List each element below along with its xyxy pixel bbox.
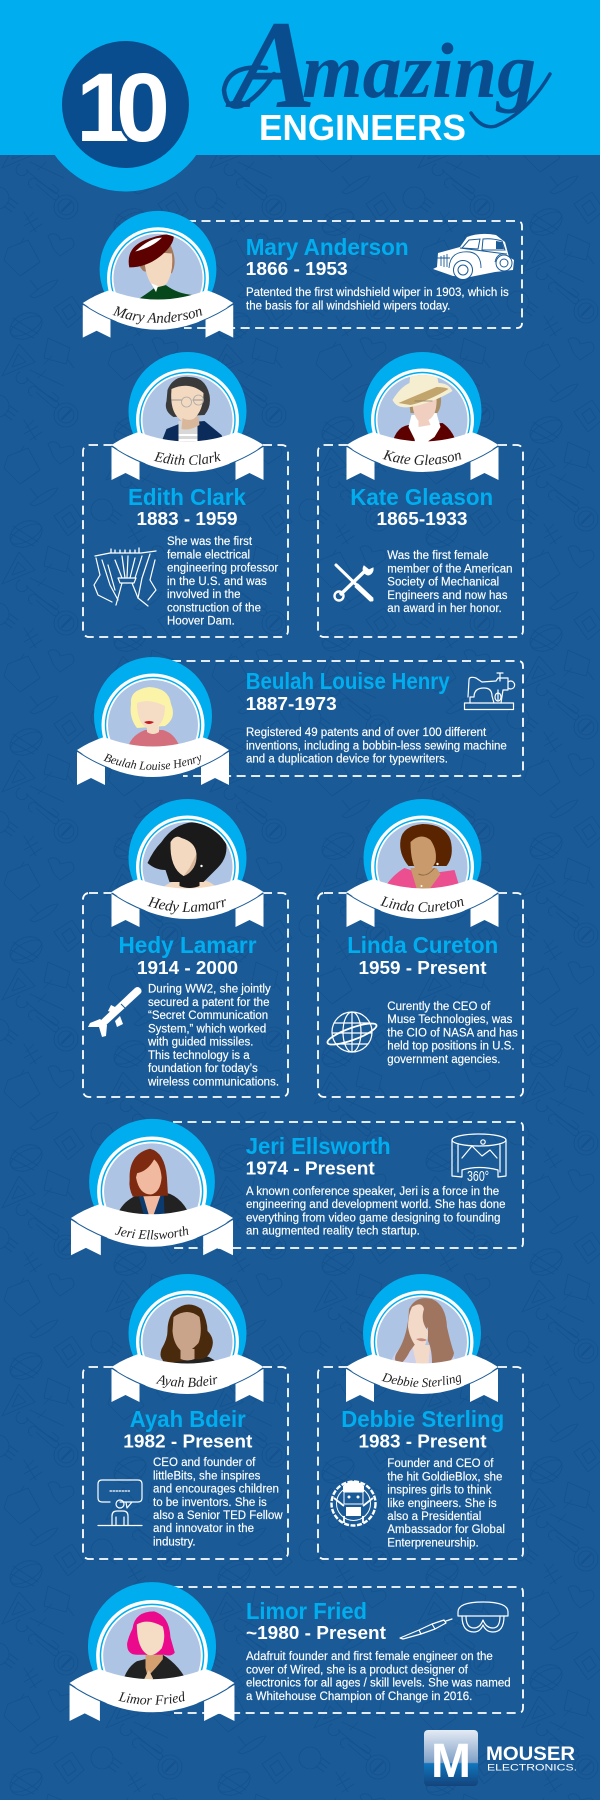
- description: to be inventors. She is: [153, 1497, 267, 1509]
- portrait badge: Kate Gleason: [346, 352, 498, 480]
- description: the CIO of NASA and has: [387, 1027, 518, 1039]
- description: inspires girls to think: [387, 1484, 492, 1496]
- header band: [0, 0, 600, 192]
- name: Hedy Lamarr: [118, 932, 257, 958]
- portrait badge: Linda Cureton: [346, 799, 499, 927]
- portrait badge: Mary Anderson: [82, 210, 234, 338]
- portrait badge: Ayah Bdeir: Ayah Bdeir: [156, 1375, 218, 1388]
- description: Ambassador for Global: [387, 1524, 505, 1536]
- description: Hoover Dam.: [167, 616, 235, 628]
- portrait badge: Edith Clark: [112, 352, 264, 480]
- icon: car: [433, 234, 514, 280]
- description: littleBits, she inspires: [153, 1470, 261, 1482]
- description: Muse Technologies, was: [387, 1014, 513, 1026]
- description: engineering professor: [167, 563, 278, 575]
- icon: safety goggles: [458, 1602, 508, 1632]
- panel: Beulah Louise Henry: [77, 657, 524, 785]
- description: a Whitehouse Champion of Change in 2016.: [246, 1691, 472, 1703]
- portrait badge: Linda Cureton: Linda Cureton: [380, 896, 464, 912]
- title: Amazing: A: [225, 0, 316, 135]
- description: Society of Mechanical: [387, 576, 499, 588]
- description: in the U.S. and was: [167, 576, 267, 588]
- title: Amazing: [224, 0, 550, 135]
- portrait badge: Beulah Louise Henry: Beulah Louise Henry: [103, 754, 202, 770]
- description: During WW2, she jointly: [148, 984, 271, 996]
- name: Debbie Sterling: [341, 1406, 504, 1432]
- portrait badge: Debbie Sterling: Debbie Sterling: [382, 1372, 462, 1388]
- description: inventions, including a bobbin-less sewing machine: [246, 740, 507, 752]
- description: everything from video game designing to founding: [246, 1212, 500, 1224]
- description: System,” which worked: [148, 1023, 266, 1035]
- description: and encourages children: [153, 1484, 279, 1496]
- name: Jeri Ellsworth: [246, 1133, 391, 1159]
- panel: Linda Cureton: [317, 799, 524, 1098]
- portrait badge: Edith Clark: Edith Clark: [154, 452, 221, 465]
- description: also a Presidential: [387, 1511, 481, 1523]
- logo: Mouser Electronics: [424, 1730, 577, 1788]
- panel: Ayah Bdeir: [82, 1274, 289, 1560]
- portrait badge: Jeri Ellsworth: [71, 1118, 233, 1256]
- description: and innovator in the: [153, 1523, 254, 1535]
- description: the basis for all windshield wipers today.: [246, 300, 450, 312]
- dates: 1983 - Present: [358, 1431, 486, 1452]
- dates: 1883 - 1959: [136, 508, 238, 529]
- dates: 1866 - 1953: [246, 258, 348, 279]
- icon: dam: [94, 548, 156, 606]
- description: foundation for today’s: [148, 1063, 258, 1075]
- icon: speaker with speech bubble: [98, 1480, 142, 1526]
- dates: ~1980 - Present: [246, 1622, 386, 1643]
- description: secured a patent for the: [148, 997, 269, 1009]
- panel: Kate Gleason: [317, 352, 524, 638]
- name: Mary Anderson: [246, 234, 409, 260]
- dates: 1959 - Present: [358, 957, 486, 978]
- description: wireless communications.: [147, 1076, 279, 1088]
- portrait badge: Hedy Lamarr: [111, 799, 264, 927]
- icon: globe: [326, 1012, 378, 1052]
- description: like engineers. She is: [387, 1498, 497, 1510]
- number badge: 10: [62, 41, 189, 168]
- description: female electrical: [167, 549, 250, 561]
- description: cover of Wired, she is a product designer of: [246, 1664, 469, 1676]
- portrait badge: Jeri Ellsworth: Jeri Ellsworth: [114, 1226, 189, 1240]
- description: Curently the CEO of: [387, 1001, 491, 1013]
- description: held top positions in U.S.: [387, 1041, 515, 1053]
- name: Beulah Louise Henry: [246, 668, 450, 694]
- dates: 1974 - Present: [246, 1158, 375, 1179]
- logo wordmark: MOUSER: [486, 1743, 575, 1765]
- description: an award in her honor.: [387, 603, 502, 615]
- description: electronics for all ages / skill levels. She was named: [246, 1678, 511, 1690]
- icon: soldering iron: [400, 1619, 452, 1639]
- icon: 360 view: [452, 1134, 506, 1185]
- panel: Jeri Ellsworth: [71, 1118, 524, 1256]
- name: Ayah Bdeir: [130, 1406, 246, 1432]
- portrait badge: Debbie Sterling: [346, 1274, 498, 1402]
- description: Engineers and now has: [387, 590, 508, 602]
- description: with guided missiles.: [147, 1037, 253, 1049]
- panel: Limor Fried: [70, 1582, 524, 1721]
- description: CEO and founder of: [153, 1457, 256, 1469]
- dates: 1887-1973: [246, 693, 337, 714]
- description: engineering and development world. She has done: [246, 1199, 506, 1211]
- number badge: 10: 1: [76, 53, 130, 162]
- icon: wrench and screwdriver: [334, 565, 373, 600]
- description: Adafruit founder and first female engineer on the: [246, 1651, 493, 1663]
- description: She was the first: [167, 536, 253, 548]
- description: Enterpreneurship.: [387, 1537, 479, 1549]
- panel: Mary Anderson: [82, 210, 523, 338]
- description: industry.: [153, 1536, 196, 1548]
- name: Limor Fried: [246, 1598, 367, 1624]
- dates: 1865-1933: [376, 508, 468, 529]
- description: an augmented reality tech startup.: [246, 1226, 420, 1238]
- description: This technology is a: [148, 1050, 250, 1062]
- panel: Debbie Sterling: [317, 1274, 524, 1560]
- icon: robot badge: [332, 1481, 376, 1526]
- description: construction of the: [167, 602, 261, 614]
- portrait badge: Limor Fried: [70, 1582, 234, 1721]
- description: member of the American: [387, 563, 513, 575]
- title: Amazing: mazing: [302, 27, 536, 114]
- description: also a Senior TED Fellow: [153, 1510, 283, 1522]
- logo mark: M: [431, 1735, 471, 1788]
- description: Founder and CEO of: [387, 1458, 494, 1470]
- portrait badge: Limor Fried: Limor Fried: [118, 1691, 185, 1705]
- portrait badge: Kate Gleason: Kate Gleason: [382, 450, 462, 465]
- title: Engineers: ENGINEERS: [259, 107, 466, 148]
- description: Patented the first windshield wiper in 1903, which is: [246, 287, 509, 299]
- description: government agencies.: [387, 1054, 500, 1066]
- icon: missile: [88, 987, 141, 1037]
- portrait badge: Hedy Lamarr: Hedy Lamarr: [147, 896, 226, 914]
- name: Kate Gleason: [350, 484, 493, 510]
- portrait badge: Beulah Louise Henry: [77, 657, 229, 785]
- portrait badge: Mary Anderson: Mary Anderson: [112, 306, 203, 324]
- description: A known conference speaker, Jeri is a force in the: [246, 1186, 499, 1198]
- name: Linda Cureton: [347, 932, 498, 958]
- description: and a duplication device for typewriters.: [246, 754, 448, 766]
- logo wordmark: ELECTRONICS.: [487, 1762, 577, 1774]
- panel: Edith Clark: [82, 352, 289, 638]
- logo mark: [424, 1730, 478, 1788]
- dates: 1914 - 2000: [137, 957, 238, 978]
- description: involved in the: [167, 589, 241, 601]
- description: Was the first female: [387, 550, 488, 562]
- icon: 360 view: 360°: [467, 1169, 489, 1185]
- description: Registered 49 patents and of over 100 different: [246, 727, 487, 739]
- name: Edith Clark: [128, 484, 246, 510]
- dates: 1982 - Present: [123, 1431, 252, 1452]
- icon: sewing machine: [464, 673, 515, 710]
- description: “Secret Communication: [148, 1010, 268, 1022]
- portrait badge: Ayah Bdeir: [112, 1274, 264, 1402]
- panel: Hedy Lamarr: [82, 799, 289, 1098]
- number badge: 10: 0: [116, 53, 170, 162]
- description: the hit GoldieBlox, she: [387, 1471, 502, 1483]
